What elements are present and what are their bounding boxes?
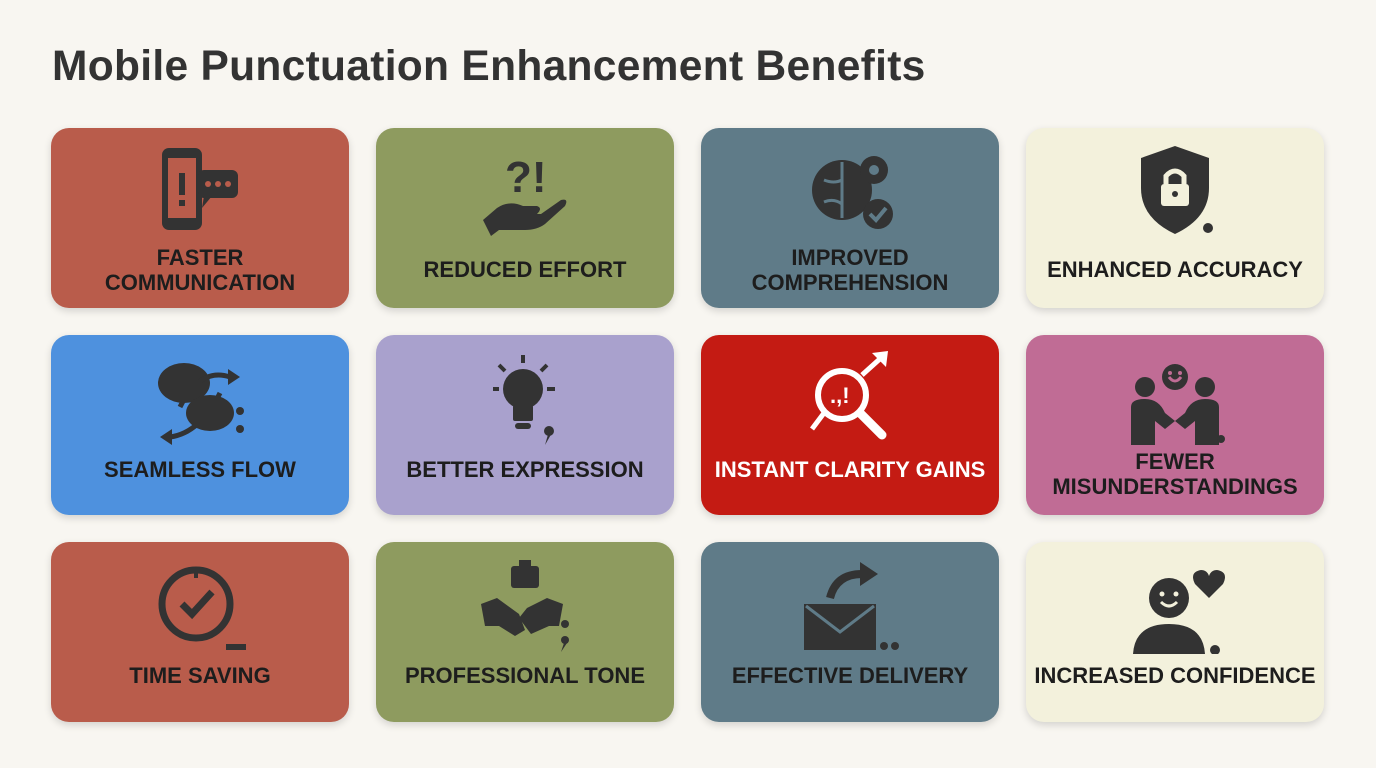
label: INCREASED CONFIDENCE [1034, 663, 1316, 688]
icon: brain with gear and check [812, 156, 893, 229]
title: Mobile Punctuation Enhancement Benefits [52, 43, 926, 90]
label [752, 245, 948, 295]
card: instant clarity gains [701, 335, 999, 515]
label: ENHANCED ACCURACY [1047, 257, 1303, 282]
label: FEWER [1135, 449, 1215, 474]
icon: light bulb with comma [493, 355, 555, 445]
icon: magnifier with arrow: .,! [830, 383, 850, 408]
icon: envelope with arrow [804, 562, 899, 650]
card: faster communication [51, 128, 349, 308]
icon: smiling person with heart [1133, 570, 1225, 654]
card: fewer misunderstandings [1026, 335, 1324, 515]
card: seamless flow [51, 335, 349, 515]
label: PROFESSIONAL TONE [405, 663, 645, 688]
icon: clock with check [158, 566, 246, 650]
label: TIME SAVING [129, 663, 271, 688]
card: better expression [376, 335, 674, 515]
label: INSTANT CLARITY GAINS [715, 457, 985, 482]
label: EFFECTIVE DELIVERY [732, 663, 968, 688]
card: reduced effort [376, 128, 674, 308]
icon: magnifier with arrow [810, 351, 888, 440]
label [105, 245, 295, 295]
card: increased confidence [1026, 542, 1324, 722]
label: FASTER [157, 245, 243, 270]
icon: people shaking hands [1131, 364, 1225, 445]
label: BETTER EXPRESSION [406, 457, 644, 482]
label: REDUCED EFFORT [424, 257, 626, 282]
card: enhanced accuracy [1026, 128, 1324, 308]
card: effective delivery [701, 542, 999, 722]
card: improved comprehension [701, 128, 999, 308]
card: time saving [51, 542, 349, 722]
icon: phone with chat [162, 148, 238, 230]
label: COMMUNICATION [105, 270, 295, 295]
label: SEAMLESS FLOW [104, 457, 296, 482]
icon: shield with lock [1141, 146, 1213, 234]
label: COMPREHENSION [752, 270, 948, 295]
label: MISUNDERSTANDINGS [1052, 474, 1298, 499]
card: professional tone [376, 542, 674, 722]
icon: hand with ?!: ?! [505, 153, 547, 202]
icon: briefcase handshake [481, 560, 569, 652]
label: IMPROVED [791, 245, 909, 270]
icon: chat bubbles with arrows [158, 363, 244, 445]
icon: hand with ?! [483, 153, 566, 236]
label [1052, 449, 1298, 499]
